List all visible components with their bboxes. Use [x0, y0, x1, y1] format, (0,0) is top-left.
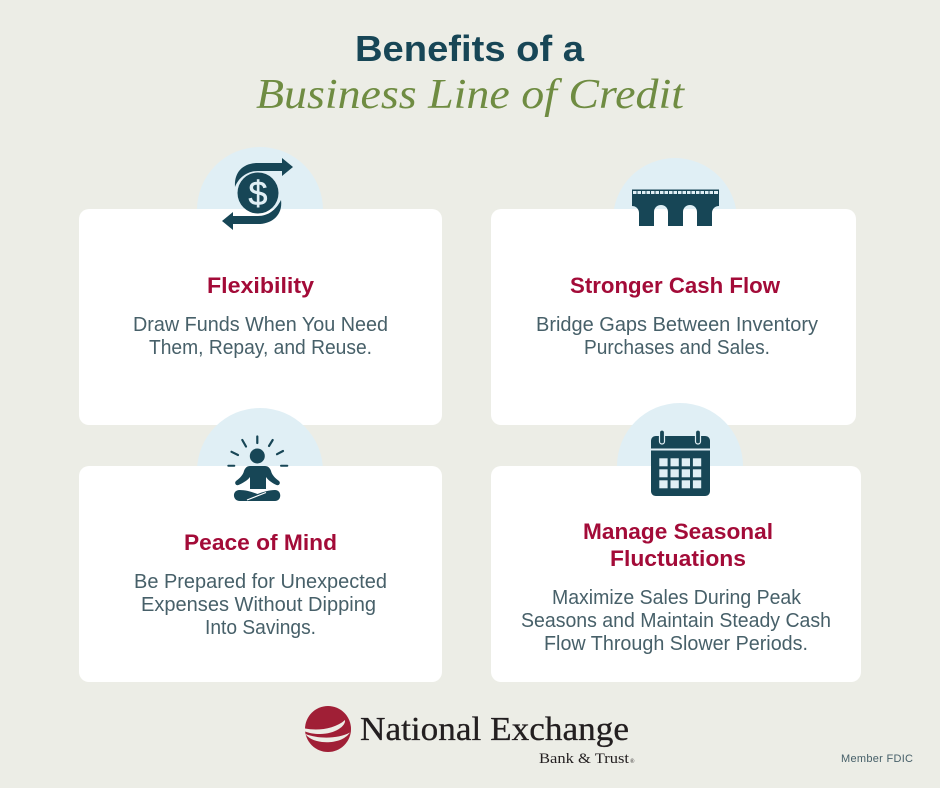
heading: peace of mind: Peace of Mind	[184, 530, 337, 555]
text: flexibility description: Draw Funds When You Need	[133, 314, 388, 336]
icon backdrop: cash flow	[613, 158, 737, 282]
text: flexibility description: Them, Repay, and Reuse.	[149, 337, 372, 359]
text: cash flow description: Bridge Gaps Between Inventory	[536, 314, 818, 336]
text: seasonal description	[521, 587, 831, 655]
logo wordmark: National Exchange	[360, 711, 629, 748]
logo: National Exchange Bank & Trust	[305, 706, 635, 767]
member fdic note: Member FDIC	[841, 753, 913, 765]
logo mark: red globe	[305, 706, 351, 752]
text: seasonal description: Seasons and Maintain Steady Cash	[521, 610, 831, 632]
title: Benefits of a	[355, 28, 585, 69]
heading: flexibility: Flexibility	[207, 273, 314, 298]
icon: bridge	[632, 190, 719, 226]
text: seasonal description: Maximize Sales During Peak	[552, 587, 802, 609]
panel: manage seasonal fluctuations	[491, 466, 861, 682]
icon: calendar	[651, 430, 710, 496]
icon: meditating person	[227, 436, 288, 501]
heading: manage seasonal fluctuations: Manage Seasonal	[583, 519, 773, 544]
panel: stronger cash flow	[491, 209, 856, 425]
heading: manage seasonal fluctuations	[583, 519, 773, 571]
heading: manage seasonal fluctuations: Fluctuations	[610, 546, 746, 571]
text: seasonal description: Flow Through Slower Periods.	[544, 633, 808, 655]
text: peace of mind description	[134, 571, 387, 639]
title: Business Line of Credit	[256, 72, 685, 118]
icon backdrop: peace of mind	[197, 408, 323, 534]
panel: peace of mind	[79, 466, 442, 682]
logo registered mark: ®	[630, 758, 635, 765]
heading: stronger cash flow: Stronger Cash Flow	[570, 273, 780, 298]
text: peace of mind description: Expenses Without Dipping	[141, 594, 376, 616]
icon: circulating dollar	[222, 158, 293, 230]
icon backdrop: flexibility	[197, 147, 323, 273]
text: cash flow description: Purchases and Sales.	[584, 337, 770, 359]
text: cash flow description	[536, 314, 818, 359]
icon: circulating dollar: $	[249, 175, 268, 213]
logo tagline: Bank & Trust	[539, 751, 630, 767]
panel: flexibility	[79, 209, 442, 425]
icon backdrop: seasonal	[617, 403, 743, 529]
text: flexibility description	[133, 314, 388, 359]
text: peace of mind description: Be Prepared for Unexpected	[134, 571, 387, 593]
title	[256, 28, 685, 118]
text: peace of mind description: Into Savings.	[205, 617, 316, 639]
